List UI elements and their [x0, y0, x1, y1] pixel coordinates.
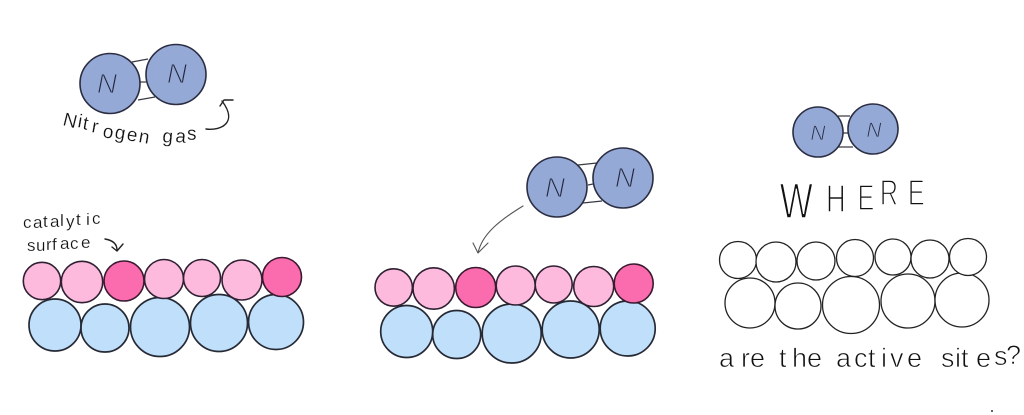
- label: nitrogen gas: Nitrogen gas: [61, 109, 196, 149]
- heading: where: E: [908, 173, 925, 213]
- icon: nitrogen molecule: N: [866, 119, 882, 142]
- heading: where: W: [780, 174, 813, 230]
- icon: nitrogen molecule: N: [810, 122, 826, 145]
- icon: nitrogen molecule: N: [545, 172, 566, 203]
- panel: nitrogen approaching the surface: [375, 148, 655, 363]
- decorative dot: [991, 410, 993, 412]
- upper pink atom layer: [23, 258, 302, 303]
- chart: blank surface atoms: [720, 238, 989, 334]
- panel: where are the active sites: [719, 104, 1021, 412]
- icon: nitrogen molecule: [80, 44, 206, 114]
- heading: where: E: [857, 178, 874, 218]
- label: catalytic surface: surface: [27, 233, 90, 255]
- panel: nitrogen gas and catalytic surface: [23, 44, 304, 356]
- icon: nitrogen molecule: [793, 104, 898, 157]
- heading: where: R: [880, 173, 898, 213]
- arrow: pointing to nitrogen molecule: [206, 100, 233, 129]
- arrow: molecule moving to surface: [473, 206, 523, 253]
- label: catalytic surface: catalytic: [23, 209, 101, 232]
- arrow: pointing to catalytic surface: [105, 239, 123, 251]
- lower blue atom layer: [29, 294, 304, 356]
- chart: surface atoms: [23, 258, 304, 356]
- upper pink atom layer: [375, 264, 653, 309]
- label: catalytic surface: [23, 209, 101, 255]
- icon: nitrogen molecule: [527, 148, 653, 217]
- icon: nitrogen molecule: N: [615, 162, 636, 193]
- icon: nitrogen molecule: N: [167, 58, 188, 89]
- chart: surface atoms: [375, 264, 655, 363]
- icon: nitrogen molecule: N: [97, 68, 118, 99]
- heading: where: H: [826, 178, 846, 221]
- text: are the active sites: are the active sites?: [719, 340, 1021, 373]
- lower blue atom layer: [381, 301, 655, 363]
